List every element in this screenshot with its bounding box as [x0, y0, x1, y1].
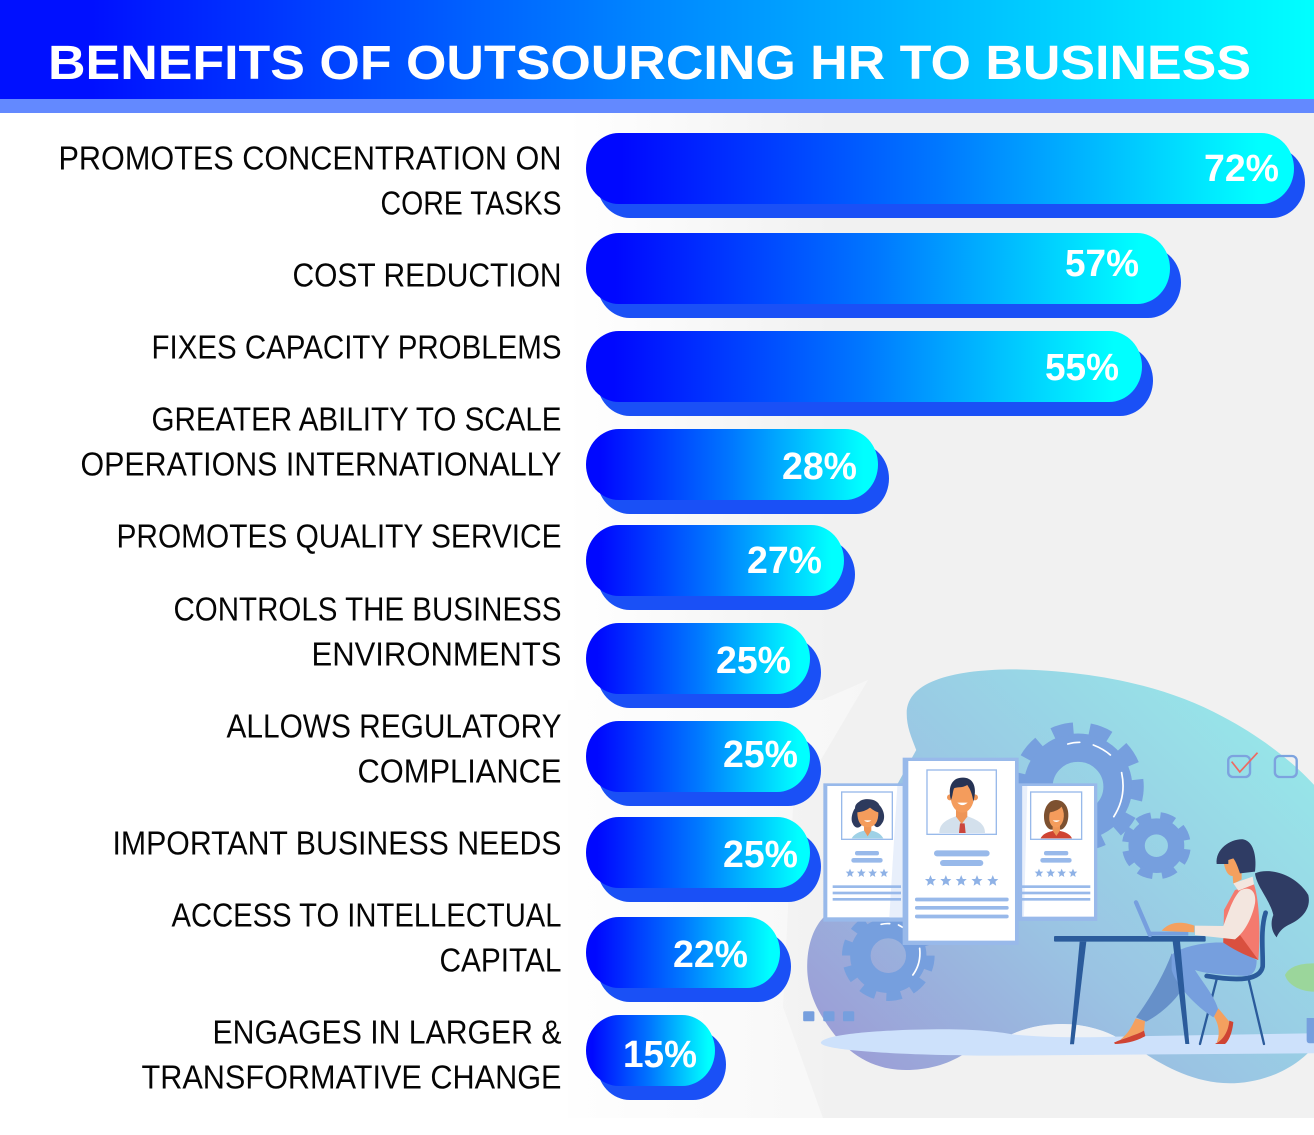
hand: [1162, 923, 1194, 932]
bar: 25% important business needs: 25%: [723, 834, 798, 876]
label: promotes quality service: PROMOTES QUALITY SERVICE: [116, 518, 562, 554]
cup: [1307, 1018, 1314, 1043]
desk: [1054, 936, 1206, 1044]
label: promotes concentration on core tasks: CORE TASKS: [380, 184, 562, 222]
candidate card: right: [1018, 783, 1097, 921]
bar: 27% promotes quality service: [586, 525, 855, 610]
laptop: [1136, 902, 1188, 936]
label: controls the business environments: CONTROLS THE BUSINESS: [174, 590, 562, 628]
label: promotes concentration on core tasks: [58, 140, 562, 222]
panel background: [568, 113, 1314, 1118]
bar: 25% allows regulatory compliance: 25%: [723, 734, 798, 776]
collar: [1233, 877, 1254, 891]
near foot: [1214, 1008, 1229, 1043]
bar: 22% access to intellectual capital: 22%: [673, 934, 748, 976]
bar: 57% cost reduction: [586, 233, 1181, 318]
bar: 28% scale operations internationally: [586, 429, 889, 514]
label: access to intellectual capital: ACCESS TO INTELLECTUAL: [172, 896, 562, 934]
torso vest: [1223, 884, 1259, 960]
portrait: man with tie: [927, 770, 996, 834]
far leg: [1136, 953, 1185, 1022]
label: fixes capacity problems: FIXES CAPACITY PROBLEMS: [152, 328, 562, 366]
plant leaf: [1285, 963, 1314, 992]
bar: 15% larger and transformative change: 15%: [623, 1034, 697, 1076]
blouse arm: [1195, 889, 1255, 939]
gear: large top: [1012, 722, 1144, 852]
title banner: [0, 0, 1314, 113]
small squares: [803, 1011, 854, 1021]
chair: [1200, 913, 1266, 1044]
ground: [821, 1024, 1314, 1056]
label: greater ability to scale operations internationally: GREATER ABILITY TO SCALE: [152, 400, 562, 438]
candidate cards: [823, 758, 1097, 945]
bar: 25% allows regulatory compliance: [586, 721, 821, 806]
label: allows regulatory compliance: [226, 708, 562, 790]
bar: 25% controls the business environments: 25%: [716, 640, 791, 682]
label: greater ability to scale operations internationally: [80, 400, 562, 482]
label: important business needs: IMPORTANT BUSINESS NEEDS: [112, 824, 562, 862]
bar: 22% access to intellectual capital: [586, 917, 791, 1002]
illustration: HR recruiter at desk with candidate cards: [803, 669, 1314, 1083]
portrait: woman with brown hair: [1031, 792, 1082, 839]
label: controls the business environments: ENVIRONMENTS: [312, 636, 562, 672]
bar: 55% fixes capacity problems: [586, 331, 1153, 416]
labels column: [58, 140, 562, 1096]
backdrop, gears and ground: [803, 669, 1314, 1083]
bar: 72% promotes concentration on core tasks: 72%: [1204, 148, 1279, 190]
ground highlight: [1012, 1024, 1115, 1037]
near leg: [1172, 943, 1257, 1017]
checkbox icons: [1228, 753, 1297, 777]
bar: 27% promotes quality service: 27%: [747, 540, 822, 582]
label: cost reduction: COST REDUCTION: [292, 256, 562, 294]
gear: lower left: [847, 915, 930, 996]
label: engages in larger and transformative change: ENGAGES IN LARGER &: [212, 1014, 562, 1050]
bar: 25% controls the business environments: [586, 623, 821, 708]
title: BENEFITS OF OUTSOURCING HR TO BUSINESS: [48, 37, 1251, 90]
gear: small right: [1114, 804, 1198, 887]
hair: [1217, 839, 1256, 873]
candidate card: left: [823, 783, 903, 922]
portrait: woman with curly hair: [842, 792, 892, 839]
far foot: [1120, 1018, 1145, 1040]
background blob: [807, 669, 1314, 1083]
ponytail: [1255, 871, 1309, 937]
label: controls the business environments: [174, 590, 562, 672]
bar: 25% important business needs: [586, 817, 821, 902]
bar: 55% fixes capacity problems: 55%: [1045, 347, 1119, 389]
label: engages in larger and transformative change: TRANSFORMATIVE CHANGE: [142, 1058, 562, 1096]
woman working at desk: [1054, 839, 1314, 1044]
label: engages in larger and transformative change: [142, 1014, 562, 1096]
label: greater ability to scale operations internationally: OPERATIONS INTERNATIONALLY: [80, 446, 562, 482]
candidate card: centre: [903, 758, 1019, 945]
bar: 72% promotes concentration on core tasks: [586, 133, 1305, 218]
label: access to intellectual capital: [172, 896, 562, 978]
face and neck: [1224, 855, 1242, 884]
bar: 28% scale operations internationally: 28%: [782, 446, 857, 488]
label: allows regulatory compliance: ALLOWS REGULATORY: [226, 708, 562, 744]
label: access to intellectual capital: CAPITAL: [440, 942, 562, 978]
bar: 57% cost reduction: 57%: [1065, 243, 1139, 285]
label: promotes concentration on core tasks: PROMOTES CONCENTRATION ON: [58, 140, 562, 176]
label: allows regulatory compliance: COMPLIANCE: [358, 752, 562, 790]
bar: 15% larger and transformative change: [586, 1015, 726, 1100]
